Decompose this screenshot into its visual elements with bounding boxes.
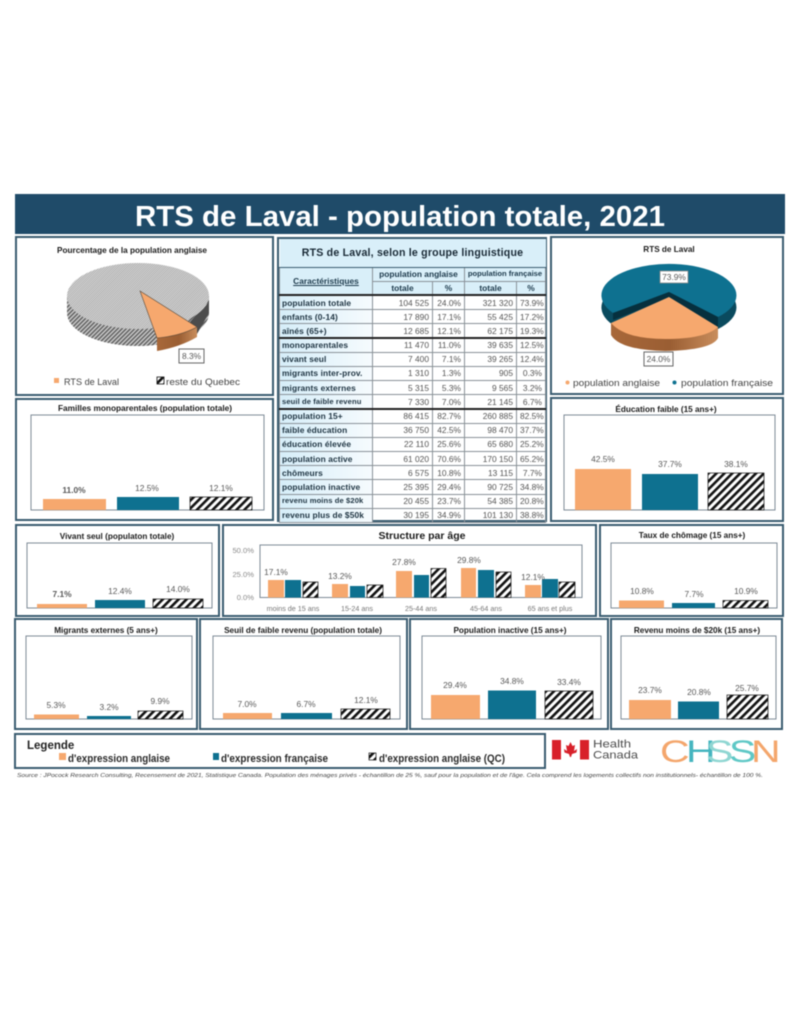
- panel: pourcentage de la population anglaise: Pourcentage de la population anglaise: [57, 246, 207, 255]
- data table: RTS de Laval, selon le groupe linguistique: 12.4%: [520, 354, 544, 364]
- panel: seuil de faible revenu: 12.1%: [354, 695, 378, 705]
- data table: RTS de Laval, selon le groupe linguistique: %: [527, 283, 535, 293]
- data table: RTS de Laval, selon le groupe linguistique: population inactive: [282, 482, 360, 492]
- panel: migrants externes: 3.2%: [99, 702, 119, 712]
- pie chart: anglaise / française: [601, 264, 736, 351]
- data table: RTS de Laval, selon le groupe linguistique: 24.0%: [437, 298, 461, 308]
- panel: familles monoparentales: [16, 399, 273, 520]
- panel: structure par age: 25.0%: [232, 570, 254, 579]
- data table: RTS de Laval, selon le groupe linguistique: 39 635: [487, 340, 513, 350]
- panel: structure par age: 50.0%: [232, 546, 254, 555]
- panel: vivant seul: 7.1%: [52, 589, 72, 599]
- panel: taux de chomage: 10.9%: [734, 586, 758, 596]
- data label: 8.3%: 8.3%: [182, 351, 202, 361]
- data table: RTS de Laval, selon le groupe linguistique: 11.0%: [438, 340, 461, 350]
- panel: revenu moins de $20k: 20.8%: [687, 687, 711, 697]
- data table: RTS de Laval, selon le groupe linguistique: 54 385: [487, 496, 513, 506]
- pie legend: population anglaise: [573, 377, 660, 388]
- panel: pourcentage de la population anglaise: [16, 237, 273, 395]
- data table: RTS de Laval, selon le groupe linguistique: 82.5%: [520, 411, 544, 421]
- data table: RTS de Laval, selon le groupe linguistique: population anglaise: [379, 269, 458, 279]
- data table: RTS de Laval, selon le groupe linguistique: population active: [282, 454, 353, 464]
- panel: structure par age: 25-44 ans: [405, 604, 437, 613]
- title banner: RTS de Laval - population totale, 2021: [135, 201, 665, 233]
- data table: RTS de Laval, selon le groupe linguistique: 25.2%: [520, 439, 544, 449]
- data table: RTS de Laval, selon le groupe linguistique: population 15+: [282, 411, 343, 421]
- data table: RTS de Laval, selon le groupe linguistique: 22 110: [404, 439, 429, 449]
- data table: RTS de Laval, selon le groupe linguistique: 7.7%: [523, 468, 542, 478]
- data table: RTS de Laval, selon le groupe linguistique: 10.8%: [437, 468, 461, 478]
- panel: structure par age: 29.8%: [457, 555, 481, 565]
- data table: RTS de Laval, selon le groupe linguistique: revenu moins de $20k: [282, 496, 363, 505]
- panel: taux de chomage: Taux de chômage (15 ans+): [639, 531, 746, 540]
- data table: RTS de Laval, selon le groupe linguistique: 170 150: [483, 454, 513, 464]
- panel: vivant seul: 12.4%: [108, 586, 132, 596]
- data table: RTS de Laval, selon le groupe linguistique: 12.5%: [520, 340, 544, 350]
- panel: population inactive: [410, 619, 608, 729]
- panel: revenu moins de $20k: 25.7%: [735, 683, 759, 693]
- data label: 73.9%: 73.9%: [662, 272, 686, 282]
- data table: RTS de Laval, selon le groupe linguistique: totale: [479, 283, 502, 293]
- data table: RTS de Laval, selon le groupe linguistique: %: [445, 283, 452, 293]
- panel: familles monoparentales: Familles monoparentales (population totale): [58, 404, 232, 413]
- data table: RTS de Laval, selon le groupe linguistique: chômeurs: [282, 468, 323, 478]
- data table: RTS de Laval, selon le groupe linguistique: 7.1%: [442, 354, 461, 364]
- data table: RTS de Laval, selon le groupe linguistique: 17.2%: [520, 312, 544, 322]
- data table: RTS de Laval, selon le groupe linguistique: 17.1%: [437, 312, 461, 322]
- data table: RTS de Laval, selon le groupe linguistique: 55 425: [487, 312, 513, 322]
- panel: seuil de faible revenu: [200, 619, 407, 729]
- logo: CHSSN: H: [686, 734, 716, 769]
- panel: taux de chomage: 10.8%: [630, 586, 654, 596]
- data table: RTS de Laval, selon le groupe linguistique: 25.6%: [437, 439, 461, 449]
- panel: migrants externes: [15, 619, 197, 729]
- data table: RTS de Laval, selon le groupe linguistique: 3.2%: [523, 383, 542, 393]
- legend: Legende: [27, 740, 74, 752]
- data table: RTS de Laval, selon le groupe linguistique: Caractéristiques: [293, 276, 359, 286]
- legend: [15, 734, 545, 768]
- data table: RTS de Laval, selon le groupe linguistique: 25 395: [403, 482, 429, 492]
- data table: RTS de Laval, selon le groupe linguistique: 7 400: [408, 354, 429, 364]
- data table: RTS de Laval, selon le groupe linguistique: 37.7%: [520, 425, 544, 435]
- pie legend: [54, 377, 240, 388]
- panel: education faible: Éducation faible (15 ans+): [615, 404, 717, 414]
- data table: RTS de Laval, selon le groupe linguistique: 6 575: [408, 468, 429, 478]
- logo: CHSSN: C: [660, 734, 690, 769]
- panel: structure par age: 17.1%: [264, 567, 288, 577]
- data table: RTS de Laval, selon le groupe linguistique: 5 315: [408, 383, 429, 393]
- data table: RTS de Laval, selon le groupe linguistique: migrants inter-prov.: [282, 368, 362, 378]
- panel: population inactive: Population inactive (15 ans+): [453, 626, 567, 635]
- data table: RTS de Laval, selon le groupe linguistique: 1 310: [408, 368, 429, 378]
- panel: education faible: 37.7%: [658, 459, 682, 469]
- legend: d'expression anglaise (QC): [379, 753, 505, 765]
- panel: education faible: 42.5%: [591, 454, 615, 464]
- panel: familles monoparentales: 11.0%: [62, 485, 86, 495]
- data table: RTS de Laval, selon le groupe linguistique: 12.1%: [437, 326, 461, 336]
- panel: population inactive: 34.8%: [500, 676, 524, 686]
- panel: structure par age: 45-64 ans: [470, 604, 502, 613]
- panel: education faible: 38.1%: [724, 459, 748, 469]
- data table: RTS de Laval, selon le groupe linguistique: revenu plus de $50k: [282, 510, 364, 520]
- data table: RTS de Laval, selon le groupe linguistique: 20 455: [403, 496, 429, 506]
- panel: seuil de faible revenu: Seuil de faible revenu (population totale): [224, 626, 382, 635]
- data table: RTS de Laval, selon le groupe linguistique: 104 525: [399, 298, 429, 308]
- data table: RTS de Laval, selon le groupe linguistique: 36 750: [403, 425, 429, 435]
- data table: RTS de Laval, selon le groupe linguistique: 42.5%: [437, 425, 461, 435]
- pie legend: [566, 377, 773, 388]
- panel: education faible: [551, 398, 783, 521]
- panel: structure par age: 15-24 ans: [341, 604, 373, 613]
- panel: revenu moins de $20k: [611, 619, 782, 729]
- panel: structure par age: Structure par âge: [379, 530, 466, 542]
- data table: RTS de Laval, selon le groupe linguistique: 17 890: [403, 312, 429, 322]
- data table: RTS de Laval, selon le groupe linguistique: 0.3%: [523, 368, 542, 378]
- data table: RTS de Laval, selon le groupe linguistique: 21 145: [487, 397, 513, 407]
- pie legend: population française: [681, 377, 773, 388]
- data table: RTS de Laval, selon le groupe linguistique: enfants (0-14): [282, 312, 338, 322]
- data table: RTS de Laval, selon le groupe linguistique: migrants externes: [282, 383, 356, 393]
- panel: vivant seul: [16, 525, 219, 616]
- pie legend: RTS de Laval: [64, 377, 119, 388]
- logo: CHSSN: N: [751, 734, 781, 769]
- panel: vivant seul: 14.0%: [166, 584, 190, 594]
- data table: RTS de Laval, selon le groupe linguistique: éducation élevée: [282, 439, 351, 449]
- panel: taux de chomage: 7.7%: [684, 589, 704, 599]
- panel: population inactive: 33.4%: [557, 677, 581, 687]
- panel: structure par age: [223, 525, 596, 616]
- data table: RTS de Laval, selon le groupe linguistique: 19.3%: [520, 326, 544, 336]
- data label: 24.0%: [644, 352, 673, 366]
- panel: taux de chomage: [600, 525, 783, 616]
- data table: RTS de Laval, selon le groupe linguistique: 13 115: [488, 468, 513, 478]
- data table: RTS de Laval, selon le groupe linguistique: aînés (65+): [282, 326, 327, 336]
- panel: vivant seul: Vivant seul (populaton totale): [60, 532, 175, 541]
- data table: RTS de Laval, selon le groupe linguistique: 98 470: [487, 425, 513, 435]
- data table: RTS de Laval, selon le groupe linguistique: totale: [391, 283, 414, 293]
- panel: familles monoparentales: 12.5%: [135, 483, 159, 493]
- panel: seuil de faible revenu: 7.0%: [237, 699, 257, 709]
- data table: RTS de Laval, selon le groupe linguistique: 7 330: [408, 397, 429, 407]
- data table: RTS de Laval, selon le groupe linguistique: [277, 237, 547, 522]
- data table: RTS de Laval, selon le groupe linguistique: 65 680: [487, 439, 513, 449]
- logo: Health Canada: Health: [593, 738, 631, 750]
- data label: 24.0%: 24.0%: [647, 354, 671, 364]
- source note: Source : JPocock Research Consulting, Recensement de 2021, Statistique Canada. Population des ménages privés - échantillon de 25 %, sauf pour la population et de l'âge. Cela comprend les logements collectifs non institutionnels- échantillon de 100 %.: [17, 773, 763, 779]
- panel: revenu moins de $20k: Revenu moins de $20k (15 ans+): [634, 626, 760, 635]
- data table: RTS de Laval, selon le groupe linguistique: 5.3%: [442, 383, 461, 393]
- data table: RTS de Laval, selon le groupe linguistique: 11 470: [404, 340, 429, 350]
- data table: RTS de Laval, selon le groupe linguistique: 7.0%: [442, 397, 461, 407]
- panel: revenu moins de $20k: 23.7%: [638, 685, 662, 695]
- data table: RTS de Laval, selon le groupe linguistique: seuil de faible revenu: [282, 397, 361, 406]
- data table: RTS de Laval, selon le groupe linguistique: 101 130: [483, 510, 513, 520]
- pie chart: population anglaise: [67, 263, 209, 351]
- data table: RTS de Laval, selon le groupe linguistique: 38.8%: [520, 510, 544, 520]
- panel: structure par age: 12.1%: [521, 572, 545, 582]
- data table: RTS de Laval, selon le groupe linguistique: 260 885: [483, 411, 513, 421]
- data table: RTS de Laval, selon le groupe linguistique: 12 685: [403, 326, 429, 336]
- data table: RTS de Laval, selon le groupe linguistique: 1.3%: [442, 368, 461, 378]
- data table: RTS de Laval, selon le groupe linguistique: 65.2%: [520, 454, 544, 464]
- pie legend: reste du Quebec: [166, 377, 240, 388]
- panel: seuil de faible revenu: 6.7%: [296, 699, 316, 709]
- data table: RTS de Laval, selon le groupe linguistique: 6.7%: [523, 397, 542, 407]
- title banner: [15, 194, 785, 234]
- logo: CHSSN: S: [706, 734, 733, 769]
- legend: d'expression française: [221, 753, 328, 765]
- data table: RTS de Laval, selon le groupe linguistique: monoparentales: [282, 340, 348, 350]
- data table: RTS de Laval, selon le groupe linguistique: 86 415: [403, 411, 429, 421]
- data table: RTS de Laval, selon le groupe linguistique: population totale: [282, 298, 351, 308]
- data table: RTS de Laval, selon le groupe linguistique: 29.4%: [437, 482, 461, 492]
- data table: RTS de Laval, selon le groupe linguistique: 70.6%: [437, 454, 461, 464]
- panel: structure par age: 65 ans et plus: [528, 604, 573, 613]
- data table: RTS de Laval, selon le groupe linguistique: vivant seul: [282, 354, 326, 364]
- data table: RTS de Laval, selon le groupe linguistique: population française: [468, 269, 542, 278]
- panel: migrants externes: Migrants externes (5 ans+): [54, 626, 158, 635]
- panel: structure par age: 13.2%: [328, 571, 352, 581]
- panel: structure par age: 0.0%: [237, 593, 254, 602]
- panel: structure par age: 27.8%: [392, 557, 416, 567]
- data table: RTS de Laval, selon le groupe linguistique: 30 195: [403, 510, 429, 520]
- panel: migrants externes: 5.3%: [46, 700, 66, 710]
- data table: RTS de Laval, selon le groupe linguistique: 39 265: [487, 354, 513, 364]
- data table: RTS de Laval, selon le groupe linguistique: 90 725: [487, 482, 513, 492]
- data table: RTS de Laval, selon le groupe linguistique: 321 320: [483, 298, 513, 308]
- legend: d'expression anglaise: [68, 753, 170, 765]
- data table: RTS de Laval, selon le groupe linguistique: faible éducation: [282, 425, 347, 435]
- data table: RTS de Laval, selon le groupe linguistique: 23.7%: [437, 496, 461, 506]
- data table: RTS de Laval, selon le groupe linguistique: RTS de Laval, selon le groupe linguistique: [302, 247, 523, 259]
- data table: RTS de Laval, selon le groupe linguistique: 9 565: [492, 383, 513, 393]
- panel: RTS de Laval pie: [551, 237, 783, 394]
- logo: CHSSN: S: [729, 734, 756, 769]
- data table: RTS de Laval, selon le groupe linguistique: 34.9%: [437, 510, 461, 520]
- panel: structure par age: moins de 15 ans: [267, 604, 320, 613]
- data table: RTS de Laval, selon le groupe linguistique: 61 020: [403, 454, 429, 464]
- data table: RTS de Laval, selon le groupe linguistique: 905: [499, 368, 513, 378]
- data table: RTS de Laval, selon le groupe linguistique: 20.8%: [520, 496, 544, 506]
- panel: migrants externes: 9.9%: [150, 696, 170, 706]
- data table: RTS de Laval, selon le groupe linguistique: 34.8%: [520, 482, 544, 492]
- panel: familles monoparentales: 12.1%: [209, 483, 233, 493]
- data label: 8.3%: [179, 349, 204, 363]
- logo: Health Canada: [552, 738, 639, 762]
- logo: CHSSN: [660, 734, 781, 769]
- data table: RTS de Laval, selon le groupe linguistique: 62 175: [487, 326, 513, 336]
- panel: RTS de Laval pie: RTS de Laval: [643, 245, 695, 254]
- logo: Health Canada: Canada: [593, 750, 639, 762]
- data table: RTS de Laval, selon le groupe linguistique: 73.9%: [520, 298, 544, 308]
- panel: population inactive: 29.4%: [443, 680, 467, 690]
- data table: RTS de Laval, selon le groupe linguistique: 82.7%: [437, 411, 461, 421]
